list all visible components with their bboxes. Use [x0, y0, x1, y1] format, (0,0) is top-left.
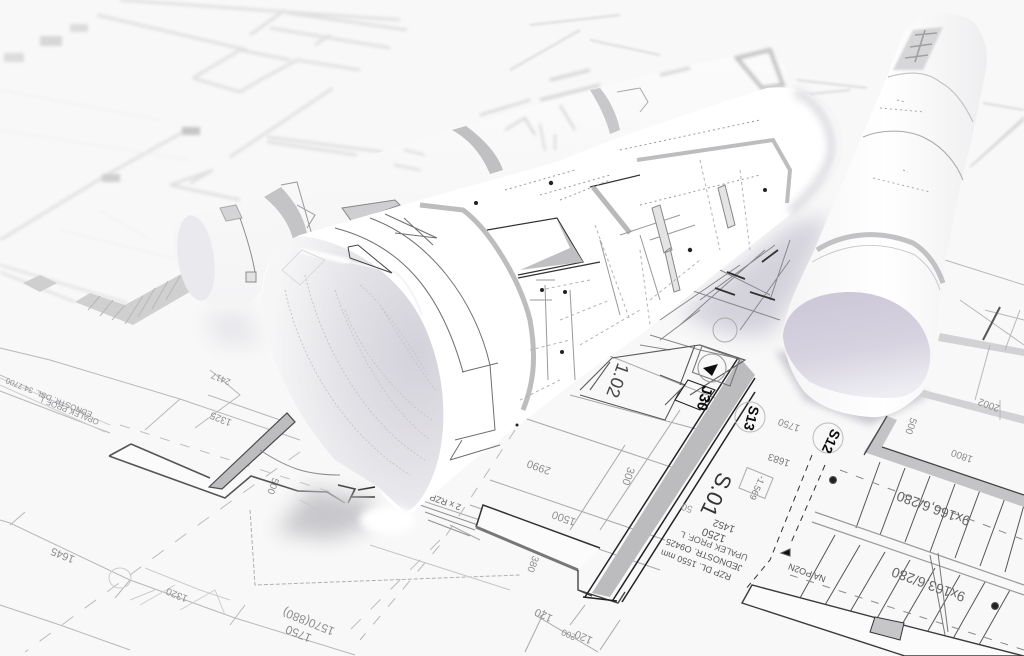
text: left dimensions: OPALEK PROF. L	[37, 394, 100, 426]
wall: lower centre	[476, 505, 625, 603]
roll 2 far end shading	[790, 92, 832, 212]
labels: S13 S12 S.01: S12	[819, 427, 844, 456]
text: lower centre dimensions: 120	[533, 605, 555, 624]
labels: S13 S12 S.01: -1.569	[747, 474, 767, 502]
shadows under rolls	[205, 215, 930, 540]
roll 1 opening	[172, 213, 220, 303]
note text: RZP DL: 1250	[700, 525, 728, 545]
wall: right	[864, 416, 1024, 507]
right dimension text	[902, 395, 1001, 464]
text: lower centre dimensions: 380	[524, 554, 540, 574]
wall: lower left	[109, 413, 375, 503]
labels: S13 S12 S.01: 1683	[766, 450, 791, 468]
floor plan: lower centre	[360, 352, 720, 652]
text: lower centre dimensions: 2 x RZP DL	[415, 487, 462, 512]
right dimension text: 2002	[976, 395, 1001, 413]
text: left dimensions: 1570(880)	[281, 605, 336, 638]
labels: S13 S12 S.01: 1750	[776, 415, 801, 433]
roll 2 fixture dots	[474, 181, 767, 426]
text: left dimensions: 1645	[49, 545, 76, 565]
right dimension text: 500	[902, 416, 918, 436]
roll 1 far end, out of focus	[395, 50, 783, 170]
note text: RZP DL: NA PO2N	[787, 561, 827, 584]
text: left dimensions: 1320	[164, 585, 189, 604]
roll 2 inner lip	[300, 250, 350, 262]
note text: RZP DL: RZP DL. 1550 mm	[659, 547, 733, 582]
label: J30: J30	[693, 384, 716, 413]
roll 3 print bands	[812, 27, 973, 290]
roll 2 show-through print	[282, 250, 435, 475]
roll 1: back left	[172, 50, 787, 310]
text: left dimensions: 2417	[210, 370, 232, 387]
roll 2 bottom glow	[360, 506, 416, 534]
stair dimension text: 9x166,6/280	[894, 488, 972, 529]
text: lower centre dimensions: 200	[560, 627, 578, 642]
labels: S13 S12 S.01: S13	[741, 404, 763, 433]
labels: S13 S12 S.01: S.01	[695, 469, 737, 520]
text: lower centre dimensions: 300	[619, 465, 637, 487]
long wall	[583, 358, 755, 602]
text: left dimensions: EDNOSTR. DSL. 34 7700	[4, 376, 94, 419]
roll 3: right	[783, 13, 987, 417]
wall: lower right	[742, 585, 1024, 656]
text: lower centre dimensions: 420	[499, 521, 515, 541]
hatched wall: upper left	[23, 273, 193, 325]
text: left dimensions: 1750	[283, 622, 314, 645]
roll 3 opening	[783, 292, 930, 398]
roll 2: centre large	[262, 87, 840, 534]
stair dimension text	[889, 488, 972, 605]
room 1.02 and door marks	[580, 345, 745, 420]
note text: RZP DL: 50	[680, 500, 694, 514]
floor plan: right, out of focus	[510, 15, 1024, 167]
text: lower centre dimensions: 2990	[525, 457, 553, 477]
note text: RZP DL: JEDNOSTR. O9425	[664, 536, 744, 573]
floor plan: upper left, out of focus	[0, 0, 407, 303]
note text: RZP DL	[659, 500, 827, 584]
note text: RZP DL: 1452	[711, 516, 736, 534]
note text: RZP DL: UPALEK PROF. L	[679, 529, 749, 563]
right dimension text: 1800	[949, 446, 974, 464]
labels: S13 S12 S.01	[695, 402, 844, 520]
label: room 1.02: 1.02	[602, 361, 633, 400]
plan detail under the centre roll	[640, 240, 790, 360]
stair dimension text: 9x163,6/280	[889, 564, 967, 605]
text: lower centre dimensions: 1500	[550, 508, 578, 528]
floor plan: lower left	[0, 348, 520, 655]
roll 1 print bands	[220, 88, 648, 282]
text: lower centre dimensions: 120	[573, 627, 595, 646]
staircase	[745, 455, 1024, 652]
roll 2 interior	[262, 236, 443, 512]
roll 2 printed plan	[335, 120, 790, 460]
text: left dimensions: 500	[264, 476, 280, 496]
text: lower centre dimensions	[415, 457, 637, 646]
text: left dimensions	[4, 370, 336, 645]
floor plan: right	[918, 260, 1024, 424]
text: left dimensions: 1325	[208, 409, 233, 428]
